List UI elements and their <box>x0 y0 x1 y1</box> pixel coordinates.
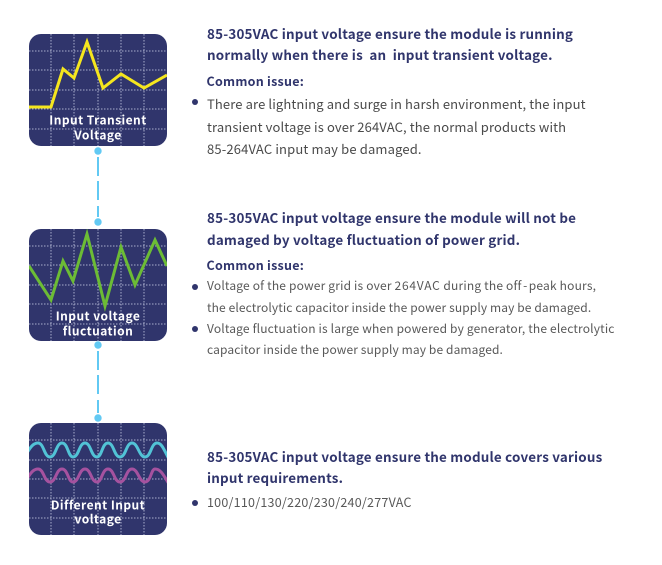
heading line 2: various input: input requirements. <box>207 467 343 487</box>
subheading: common issue: Common issue: <box>206 71 304 90</box>
label: input transient voltage: Voltage <box>73 126 122 143</box>
heading line 2: voltage fluctuation: damaged by voltage fluctuation of power grid. <box>207 229 520 249</box>
label: input voltage fluctuation: Input voltage <box>56 307 140 324</box>
subheading: common issue: Common issue: <box>206 255 304 274</box>
connector: middle to bottom <box>94 341 102 422</box>
bullet <box>192 284 198 290</box>
bullet <box>192 98 198 104</box>
chart line: purple sine wave <box>27 469 169 484</box>
label: different input voltage: Different Input <box>51 496 145 513</box>
heading: transient voltage: 85-305VAC input voltage ensure the module is running <box>207 23 573 43</box>
chart line: cyan sine wave <box>27 443 169 459</box>
bullet <box>192 500 198 506</box>
chart line: green fluctuation <box>29 234 167 306</box>
panel: input voltage fluctuation <box>29 229 167 341</box>
body text line 3: 85-264VAC input may be damaged. <box>207 139 422 158</box>
body text: generator line 1: Voltage fluctuation is large when powered by generator, the electrolytic <box>207 320 615 337</box>
connector: top to middle <box>94 147 102 226</box>
panel: input transient voltage <box>29 34 167 146</box>
body text line 2: transient voltage is over 264VAC, the normal products with <box>207 117 566 136</box>
text block: voltage fluctuation <box>192 207 615 358</box>
heading line 2: transient voltage: normally when there is an input transient voltage. <box>207 44 553 64</box>
label: input voltage fluctuation: fluctuation <box>63 322 133 339</box>
chart line: yellow transient <box>29 42 167 107</box>
body text: grid line 2: the electrolytic capacitor inside the power supply may be damaged. <box>207 299 591 316</box>
body text: voltage list: 100/110/130/220/230/240/277VAC <box>207 492 412 510</box>
body text: grid line 1: Voltage of the power grid is over 264VAC during the off-peak hours, <box>207 277 596 294</box>
label: different input voltage: voltage <box>74 510 122 527</box>
panel: different input voltage <box>27 423 169 535</box>
text block: transient voltage <box>192 23 586 158</box>
heading: various input: 85-305VAC input voltage ensure the module covers various <box>207 446 602 466</box>
heading: voltage fluctuation: 85-305VAC input voltage ensure the module will not be <box>207 207 576 227</box>
bullet <box>192 326 198 332</box>
text block: various input requirements <box>192 446 602 510</box>
label: input transient voltage: Input Transient <box>49 111 147 128</box>
body text line 1: There are lightning and surge in harsh environment, the input <box>207 94 586 113</box>
body text: generator line 2: capacitor inside the power supply may be damaged. <box>207 341 503 358</box>
diagram: oscilloscope panels and connectors <box>29 34 167 535</box>
